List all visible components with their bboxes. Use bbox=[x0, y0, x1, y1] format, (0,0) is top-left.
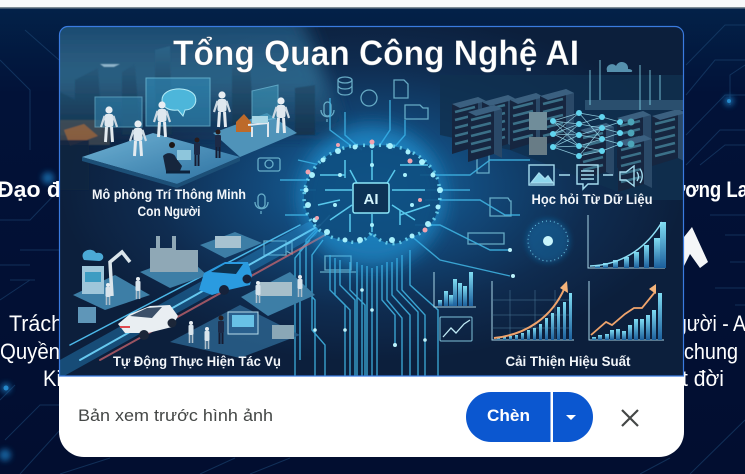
insert button: Chèn bbox=[487, 407, 530, 425]
trace glow dots bbox=[313, 248, 515, 347]
label: improve performance: Cải Thiện Hiệu Suất bbox=[506, 353, 631, 369]
central AI brain bbox=[300, 125, 444, 269]
background text left (partly hidden): Quyền bbox=[0, 339, 60, 364]
machines and robot arm bbox=[78, 236, 302, 349]
caption: image preview: Bản xem trước hình ảnh bbox=[78, 407, 273, 425]
insert button bbox=[466, 392, 550, 442]
background text left (partly hidden): Ki bbox=[43, 366, 61, 391]
background text right (partly hidden): t đời bbox=[682, 366, 724, 391]
circuit traces bbox=[280, 98, 530, 376]
small data orb bbox=[526, 219, 570, 263]
top-left circuit icons bbox=[255, 77, 511, 272]
cloud and data beams bbox=[590, 60, 660, 110]
chart: small bars bbox=[434, 272, 476, 307]
browser top bar bbox=[0, 0, 745, 8]
icon row: image to text to sound bbox=[529, 165, 642, 189]
chart: top right growth bbox=[588, 215, 666, 268]
label: automate tasks: Tự Động Thực Hiện Tác Vụ bbox=[113, 353, 281, 369]
background text right (partly hidden): chung bbox=[684, 339, 738, 364]
sky horizon bbox=[59, 27, 342, 144]
automation platforms bbox=[73, 232, 315, 358]
server side dark backdrop bbox=[440, 75, 684, 200]
background glow nodes bbox=[4, 99, 731, 390]
close icon bbox=[622, 410, 638, 426]
card white body bbox=[59, 370, 684, 457]
blue car bbox=[199, 262, 252, 295]
preview image bbox=[59, 27, 683, 376]
label: simulate human intelligence bbox=[92, 186, 246, 219]
image blue selection border bbox=[60, 26, 684, 376]
background text left (partly hidden) bbox=[0, 311, 63, 391]
background white icon fragment bbox=[684, 227, 708, 268]
server racks bbox=[452, 89, 686, 192]
white car bbox=[118, 305, 178, 340]
title: Tổng Quan Công Nghệ AI bbox=[173, 34, 579, 73]
road streaks bbox=[62, 225, 325, 368]
chart: stepped growth with arrow bbox=[589, 281, 664, 340]
neural network with image inputs bbox=[529, 110, 634, 159]
background text left (partly hidden): Trách bbox=[9, 311, 63, 336]
platforms left bbox=[82, 113, 297, 188]
chart: small line panel bbox=[440, 317, 472, 341]
insert dropdown button bbox=[553, 392, 593, 442]
label: simulate human intelligence: Con Người bbox=[138, 203, 200, 219]
robots and people bbox=[101, 91, 289, 172]
background text right (partly hidden) bbox=[676, 311, 745, 391]
city skyline bbox=[60, 46, 316, 146]
label: learn from data: Học hỏi Từ Dữ Liệu bbox=[532, 191, 652, 207]
label: simulate human intelligence: Mô phỏng Trí Thông Minh bbox=[92, 186, 246, 202]
chart: curved growth with arrow bbox=[492, 281, 574, 340]
central AI brain: AI bbox=[364, 191, 378, 208]
holographic panels bbox=[95, 78, 278, 127]
